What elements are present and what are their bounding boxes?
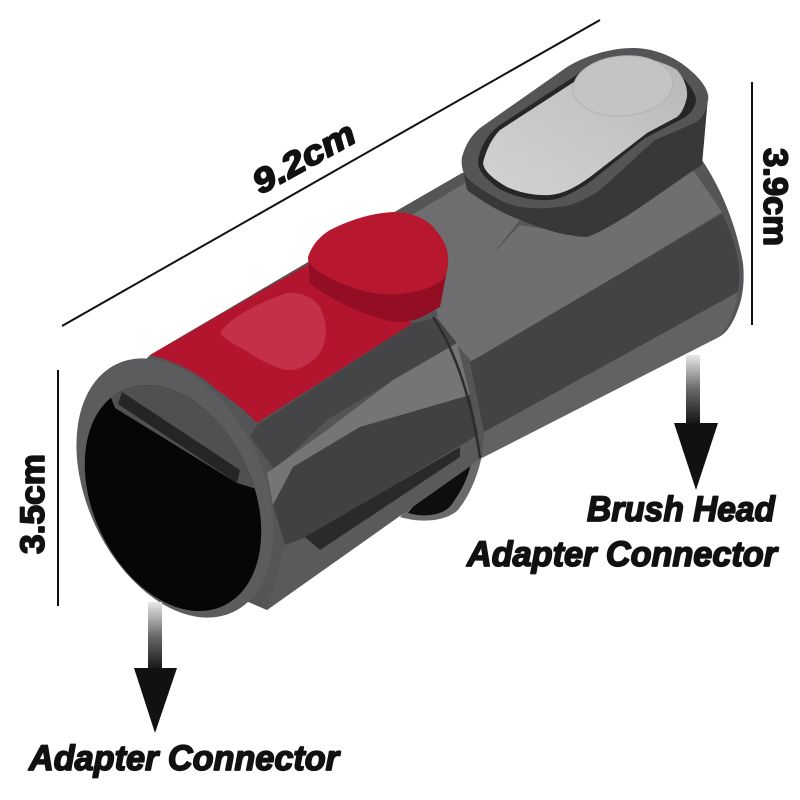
right top light band [435, 170, 722, 363]
red slider thumb [220, 293, 326, 370]
inner plate [111, 385, 254, 488]
button housing inner [478, 59, 696, 200]
dimension label: 3.9cm: 3.9cm [756, 148, 794, 246]
front ring [37, 327, 313, 649]
dimension line: 9.2cm [62, 20, 600, 326]
dimension label: 9.2cm: 9.2cm [246, 114, 362, 202]
silver button circle [571, 52, 675, 120]
label: Adapter Connector right: Adapter Connector [466, 535, 779, 574]
button housing rim [462, 48, 708, 208]
arrow: adapter connector [134, 602, 177, 733]
red slider [150, 265, 413, 423]
dimension line: 3.5cm [57, 370, 59, 606]
label: Adapter Connector bottom: Adapter Connector [28, 739, 341, 778]
silver release button [483, 56, 687, 195]
front opening [50, 356, 296, 640]
front dark facet [250, 318, 457, 470]
red round button side [308, 257, 448, 322]
collar seam [433, 317, 480, 458]
adapter illustration [76, 48, 744, 618]
dimension label: 3.5cm: 3.5cm [14, 454, 52, 554]
button housing wall [462, 97, 708, 237]
front lower band [267, 435, 482, 610]
lower slot [305, 447, 460, 550]
dimension line: 3.9cm [751, 82, 753, 325]
right lower band [482, 292, 738, 458]
body top edge [400, 180, 520, 320]
bottom connector stub [400, 455, 482, 521]
main body [77, 160, 744, 610]
front dark band [273, 395, 478, 545]
red round button top [308, 212, 448, 294]
arrow: brush head connector [674, 355, 718, 490]
front light band [267, 343, 470, 505]
right dark band [470, 214, 739, 432]
label: Brush Head: Brush Head [587, 490, 776, 529]
